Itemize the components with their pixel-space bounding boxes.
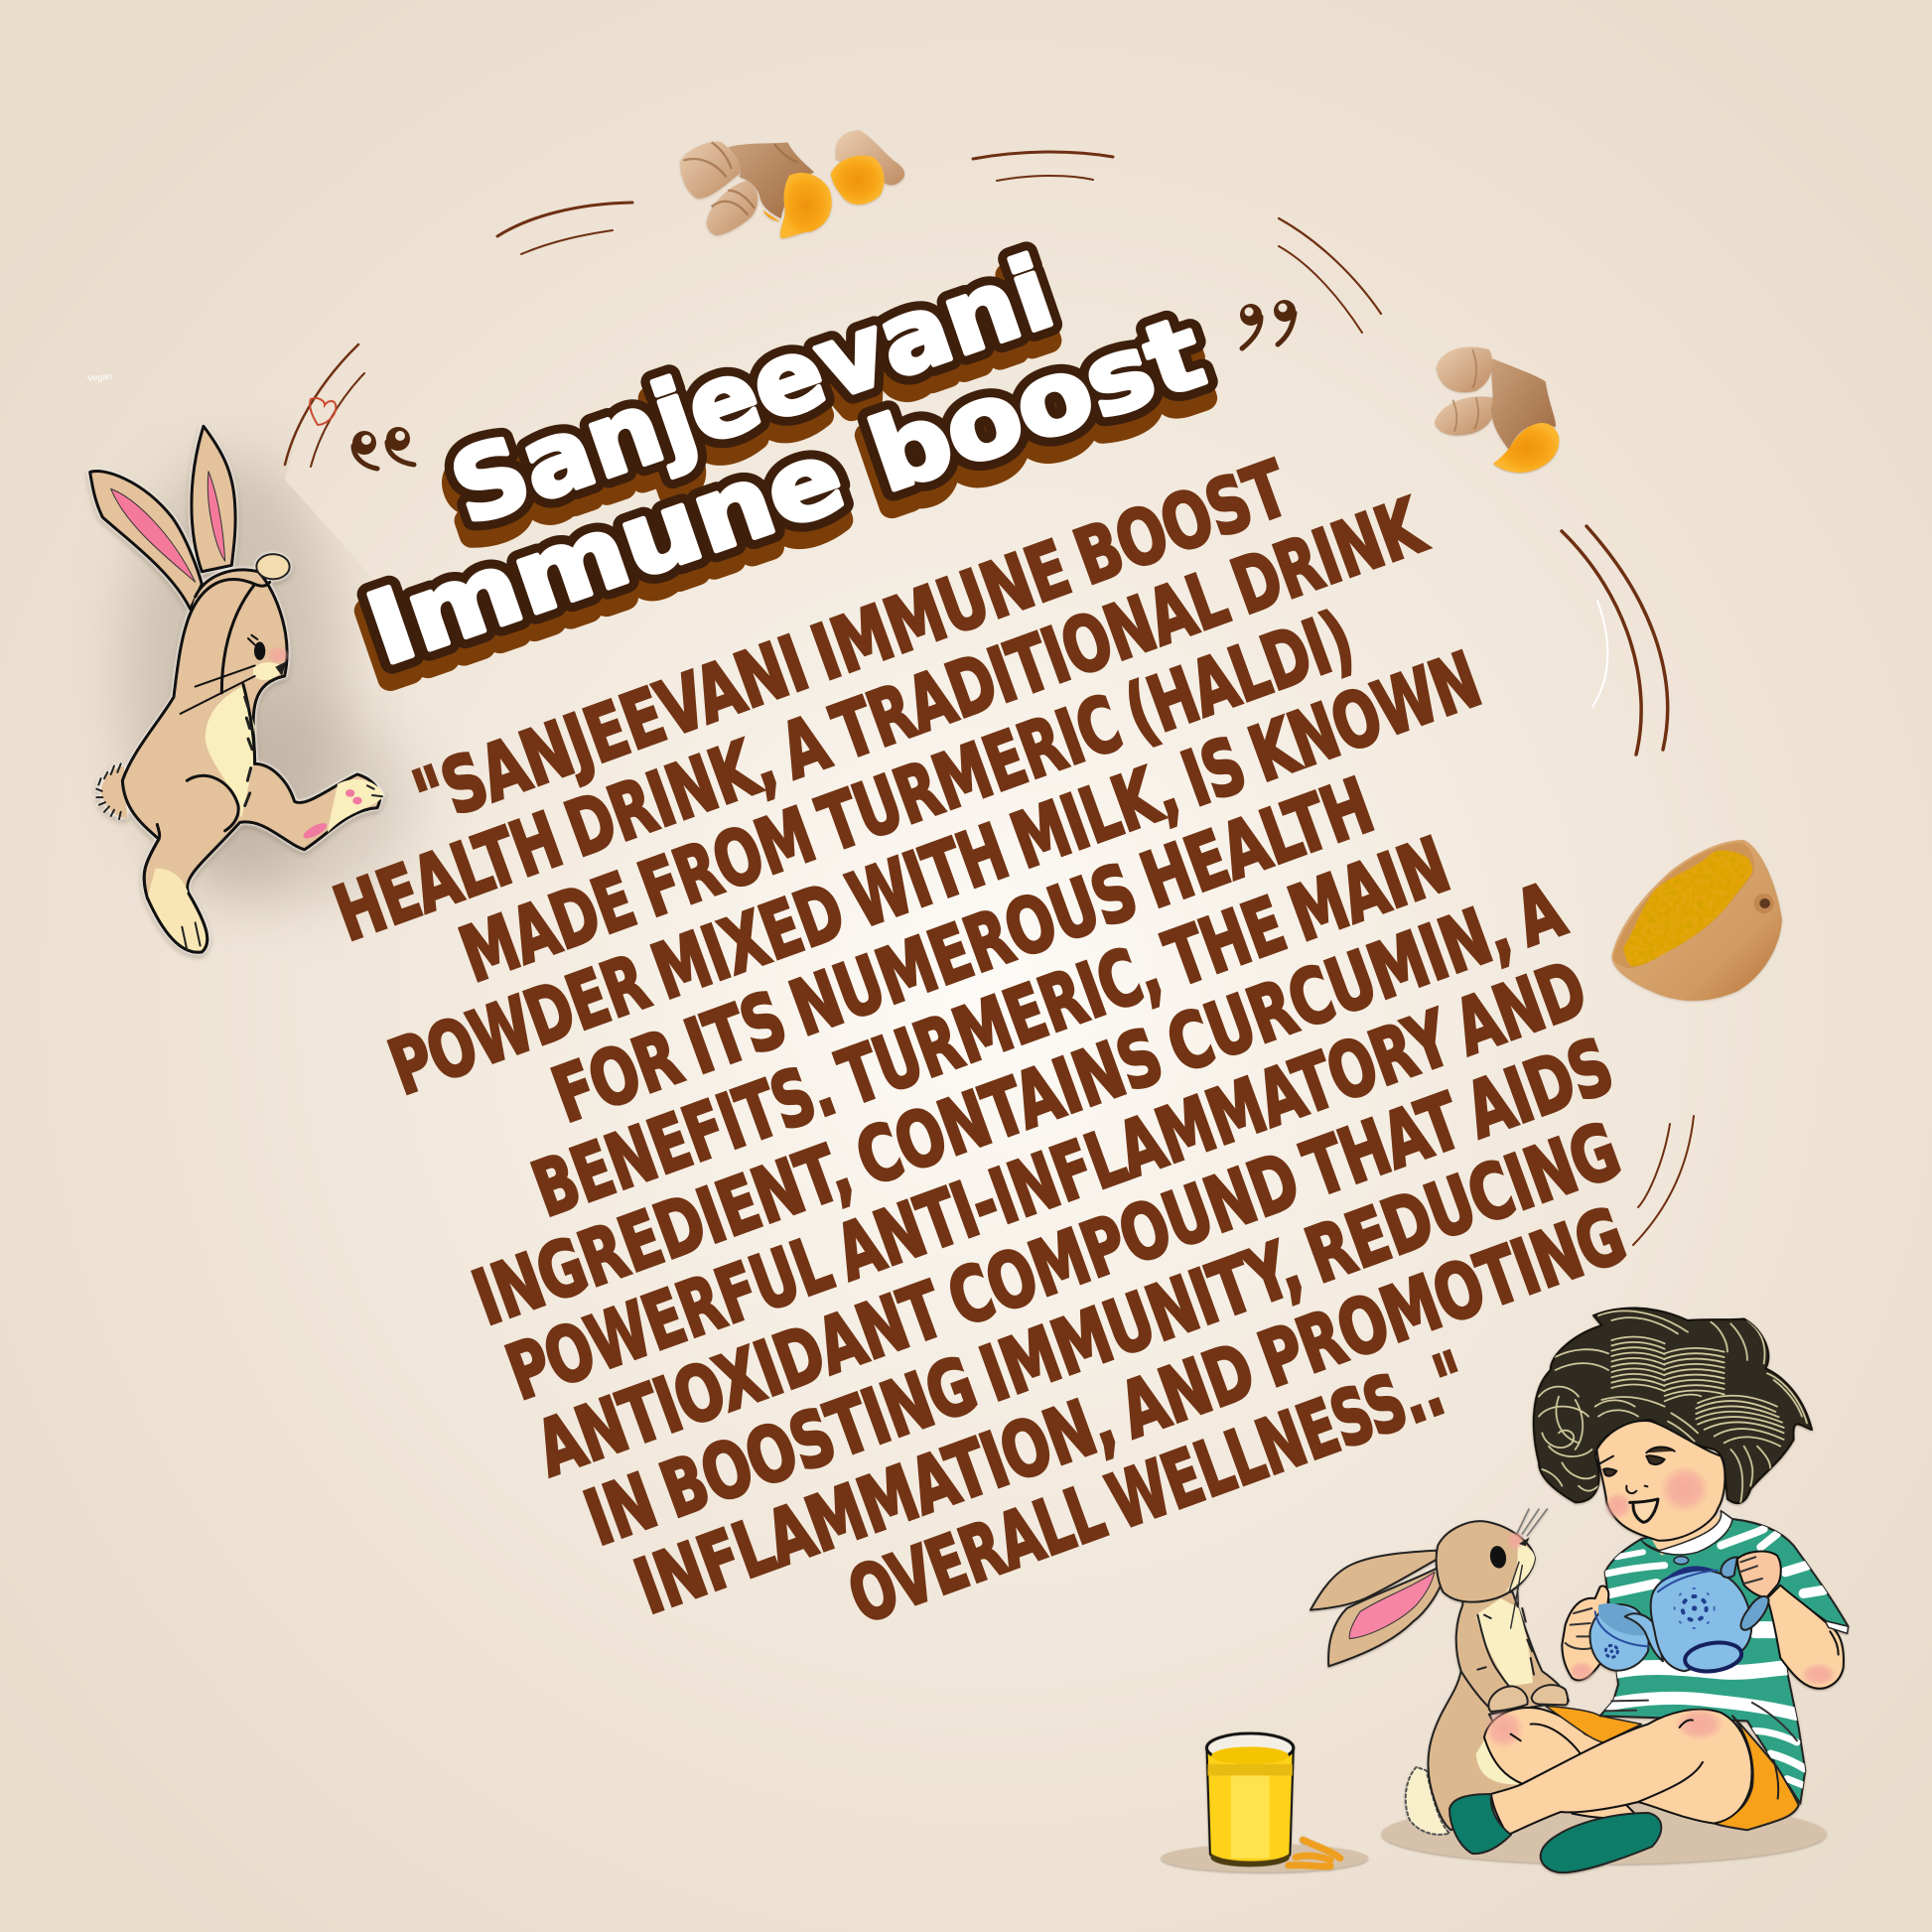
child eyes bbox=[1598, 1447, 1675, 1476]
icon: closing quote marks bbox=[1240, 300, 1296, 348]
title face: Immune boost: Immune boost bbox=[353, 294, 1217, 688]
bowl wood bbox=[1611, 840, 1782, 1001]
ground shadow glass bbox=[1161, 1844, 1368, 1872]
icon: turmeric root top bbox=[680, 130, 904, 238]
central root bbox=[1491, 358, 1556, 450]
child cheek right bbox=[1660, 1465, 1710, 1513]
upper lobe bbox=[1437, 347, 1492, 392]
decorative arcs bbox=[285, 152, 1694, 1245]
shoes bbox=[1449, 1794, 1661, 1872]
icon: wooden bowl of turmeric powder bbox=[1611, 840, 1782, 1001]
rabbit tail bbox=[96, 763, 127, 819]
ground shadow child bbox=[1382, 1804, 1827, 1864]
title outline layer: Sanjeevani bbox=[438, 234, 1066, 548]
teapot lower handle bbox=[1740, 1596, 1769, 1630]
ridges bbox=[683, 142, 797, 215]
child neck bbox=[1651, 1516, 1730, 1556]
title extrude layer: Immune boost bbox=[351, 310, 1215, 704]
rabbit back ear bbox=[1311, 1551, 1438, 1610]
icon: small heart outline bbox=[310, 398, 336, 425]
rabbit face line bbox=[157, 580, 270, 839]
cut face bbox=[1493, 423, 1559, 473]
child mouth bbox=[1630, 1499, 1658, 1522]
rabbit belly hatching bbox=[245, 697, 252, 806]
right arm bbox=[1767, 1586, 1844, 1689]
blue teapot bbox=[1625, 1557, 1751, 1675]
blue cup bbox=[1589, 1603, 1649, 1671]
icon: jumping rabbit bbox=[90, 426, 384, 952]
child collar bbox=[1641, 1511, 1732, 1555]
body text: "SANJEEVANI IMMUNE BOOST bbox=[403, 445, 1301, 844]
child face bbox=[1596, 1421, 1725, 1541]
rabbit lower whiskers bbox=[1509, 1562, 1522, 1628]
child body bbox=[1491, 1519, 1849, 1835]
turmeric powder bbox=[1623, 850, 1752, 966]
rabbit body bbox=[122, 570, 379, 952]
turmeric pieces bbox=[1289, 1840, 1340, 1866]
body text bbox=[295, 405, 1716, 1727]
ground shadows and glass bbox=[1161, 1733, 1827, 1872]
rabbit tail bbox=[1406, 1767, 1449, 1835]
left hand bbox=[1562, 1586, 1608, 1681]
child cheek left bbox=[1604, 1492, 1632, 1520]
rabbit left ear bbox=[90, 472, 202, 610]
central root bbox=[728, 142, 814, 218]
ridges bbox=[1452, 349, 1478, 432]
left lobe bbox=[680, 142, 741, 199]
icon: opening quote marks bbox=[352, 427, 414, 469]
child far leg bbox=[1484, 1708, 1603, 1784]
rabbit front ear bbox=[1328, 1567, 1443, 1666]
left shoe bbox=[1449, 1794, 1511, 1854]
rabbit cream belly bbox=[206, 687, 255, 818]
rabbit head bbox=[1437, 1521, 1535, 1602]
right hand bbox=[1737, 1552, 1781, 1597]
rabbit ear pink bbox=[1349, 1572, 1435, 1639]
rabbit cream foot bbox=[328, 779, 384, 833]
sleeve cuff bbox=[1825, 1621, 1849, 1633]
rabbit right ear bbox=[192, 426, 235, 572]
rabbit cream muzzle bbox=[253, 662, 285, 680]
body text: OVERALL WELLNESS.." bbox=[838, 1336, 1479, 1642]
child nose bbox=[1626, 1486, 1647, 1493]
near leg bbox=[1491, 1710, 1751, 1835]
shorts right bbox=[1715, 1716, 1799, 1830]
lower skin bbox=[1572, 1804, 1635, 1818]
body text: INGREDIENT, CONTAINS CURCUMIN, A bbox=[463, 867, 1576, 1343]
title extrude layer: Sanjeevani bbox=[436, 250, 1065, 564]
body text: MADE FROM TURMERIC (HALDI) bbox=[450, 596, 1364, 1001]
rabbit cheek bbox=[266, 646, 290, 664]
small orange sliver bbox=[762, 210, 780, 221]
near knee blush bbox=[1675, 1708, 1725, 1740]
lower lobe bbox=[1435, 396, 1494, 435]
golden milk glass bbox=[1206, 1733, 1294, 1866]
rabbit whiskers bbox=[181, 635, 257, 714]
rabbit ear pink inner bbox=[111, 488, 196, 582]
rabbit body bbox=[1429, 1591, 1569, 1830]
rabbit muzzle bbox=[1506, 1544, 1535, 1591]
shorts crease bbox=[1774, 1760, 1778, 1799]
cut face bbox=[780, 173, 832, 238]
bowl knot bbox=[1754, 894, 1774, 913]
rabbit nose bbox=[1519, 1537, 1530, 1546]
small label: Vegan: Vegan bbox=[86, 371, 113, 383]
near leg creases bbox=[1638, 1720, 1703, 1802]
lower lobe bbox=[707, 181, 758, 235]
rabbit eye bbox=[254, 641, 265, 660]
body text: FOR ITS NUMEROUS HEALTH bbox=[542, 762, 1384, 1141]
rabbit paw pads bbox=[302, 789, 362, 841]
shirt bbox=[1600, 1519, 1849, 1804]
title outline layer bbox=[319, 195, 1217, 688]
rabbit whiskers bbox=[1517, 1509, 1547, 1536]
rabbit lower cream bbox=[1476, 1737, 1519, 1784]
title extrude layer bbox=[318, 210, 1215, 704]
rabbit nose blush bbox=[1506, 1531, 1525, 1550]
shorts top bbox=[1546, 1706, 1641, 1742]
right piece cut face bbox=[831, 156, 885, 205]
right piece skin bbox=[836, 130, 904, 185]
sitting rabbit bbox=[1311, 1509, 1603, 1835]
rabbit ear pink inner right bbox=[207, 472, 225, 561]
rabbit arm lines bbox=[1461, 1608, 1534, 1708]
rabbit body redraw outline bbox=[144, 684, 255, 952]
child head bbox=[1534, 1308, 1812, 1556]
icon: turmeric root right bbox=[1435, 347, 1559, 473]
rabbit cream lower foot bbox=[147, 869, 207, 952]
far knee blush bbox=[1484, 1710, 1524, 1749]
illustration: child, rabbit and glass bbox=[1161, 1308, 1849, 1872]
rabbit toes bbox=[182, 785, 382, 950]
hair bbox=[1534, 1308, 1812, 1503]
soft shadow behind jumping rabbit bbox=[124, 457, 417, 903]
rabbit paws bbox=[1488, 1685, 1568, 1712]
title outline layer: Immune boost bbox=[353, 294, 1217, 688]
rabbit hand bbox=[256, 554, 290, 579]
body text: POWDER MIXED WITH MILK, IS KNOWN bbox=[378, 636, 1491, 1113]
body text: HEALTH DRINK, A TRADITIONAL DRINK bbox=[324, 483, 1437, 959]
bowl inner rim bbox=[1613, 842, 1754, 968]
body text: BENEFITS. TURMERIC, THE MAIN bbox=[522, 822, 1459, 1235]
title face: Sanjeevani: Sanjeevani bbox=[438, 234, 1066, 548]
rabbit nose bbox=[275, 661, 286, 676]
rabbit eye bbox=[1488, 1545, 1508, 1570]
rabbit chest bbox=[1476, 1598, 1533, 1686]
far leg creases bbox=[1511, 1725, 1582, 1755]
right shoe bbox=[1541, 1813, 1661, 1872]
title: Sanjeevani Immune boost bbox=[313, 195, 1222, 704]
